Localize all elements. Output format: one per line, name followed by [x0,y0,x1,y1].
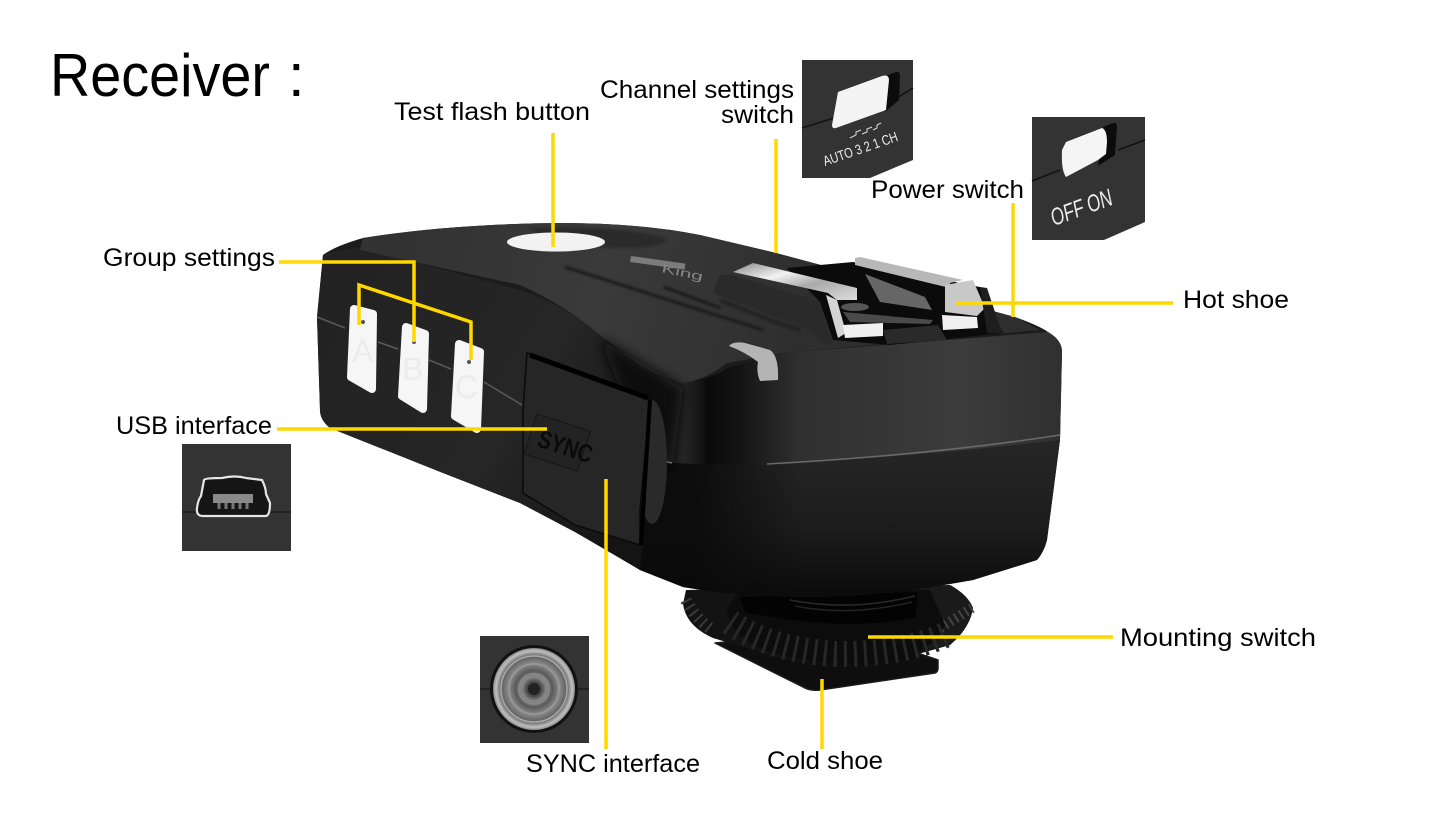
label: channel settings switch: Channel settings [600,76,794,104]
body silhouette [317,223,1062,597]
line: USB interface [277,427,547,431]
thumbnail: power switch: OFF ON [1047,184,1117,232]
line: mounting switch [868,635,1113,639]
label: channel settings switch: switch [721,101,794,129]
ring base [683,585,973,664]
label: test flash button: Test flash button [394,98,590,126]
line: group bracket A to C [359,285,471,360]
label: power switch: Power switch [871,176,1024,204]
label: hot shoe: Hot shoe [1183,286,1289,314]
side panel [317,248,680,570]
neck thread [740,592,918,624]
title: : [288,42,305,109]
line: hot shoe [955,301,1173,305]
mounting ring [683,585,973,664]
SYNC tag [524,414,596,471]
hot shoe [713,257,1003,345]
test flash button [507,232,605,252]
thumbnail: SYNC port [480,636,589,743]
raised ridges [530,227,800,330]
brand logo: King [660,261,704,284]
line: cold shoe [820,679,824,749]
thumbnail: channel settings switch [802,60,913,178]
line: test flash button [551,133,555,247]
label: USB interface: USB interface [116,412,272,440]
thumbnail: channel settings switch: AUTO 3 2 1 CH [821,128,900,169]
upper front panel [655,332,1062,465]
line: group settings [279,262,414,342]
device photo: receiver body [317,223,1062,690]
line: power switch [1011,203,1015,317]
label: cold shoe: Cold shoe [767,747,883,775]
toothed ring [727,590,945,664]
top surface [360,223,1040,383]
SYNC port cover [523,353,650,545]
label: group settings: Group settings [103,244,275,272]
line: SYNC interface [604,479,608,749]
interior [787,262,1003,345]
lower front panel [640,440,1060,597]
right rail [855,257,963,288]
fins [865,274,932,310]
yellow callout lines [277,133,1173,749]
thumbnail: power switch [1032,117,1145,240]
side oval recess [637,400,667,524]
brand logo [630,256,704,284]
line: channel settings switch [774,139,778,253]
seam lines [317,317,522,405]
button C: C [455,369,478,405]
button A: A [352,333,374,369]
dark shade beneath top [600,338,683,470]
button B: B [402,351,423,387]
back ring left teeth [686,600,712,630]
label: SYNC interface: SYNC interface [526,750,700,778]
label: channel settings switch [600,76,794,129]
left rail [713,275,833,345]
translucent clip [729,342,778,381]
group buttons A B C [351,309,480,429]
title: Receiver [50,42,270,109]
label: mounting switch: Mounting switch [1120,624,1316,652]
disc right [915,585,973,650]
SYNC tag: SYNC [534,425,596,469]
cold shoe plate [715,630,938,690]
thumbnail: USB port [182,444,291,551]
